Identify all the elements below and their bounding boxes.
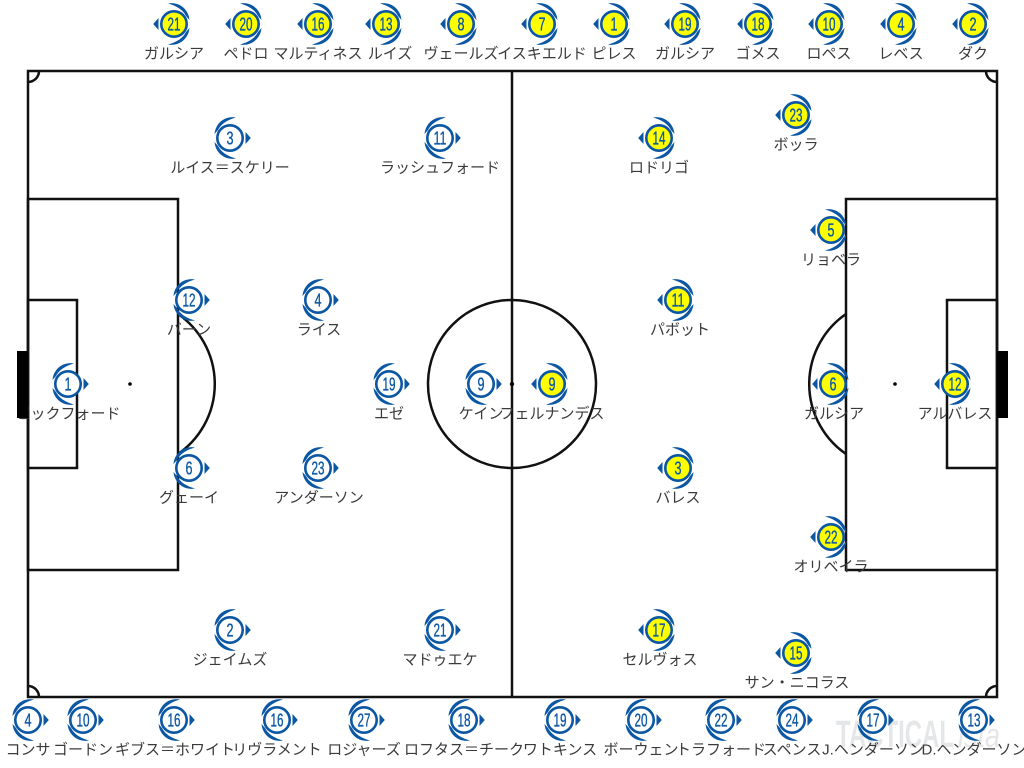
- bench: top (yellow team): 10: [822, 14, 836, 34]
- player: 3 バレス: バレス: [655, 490, 701, 506]
- player: 22 オリベイラ: オリベイラ: [793, 558, 869, 576]
- bench: top (yellow team): 21: [168, 14, 180, 34]
- player: 12 アルバレス: [918, 363, 992, 422]
- bench: bottom (white team): J.ヘンダーソン: [822, 742, 924, 758]
- bench: top (yellow team): ガルシア: [655, 46, 715, 62]
- player: 23 アンダーソン: 23: [312, 458, 324, 478]
- player: 21 マドゥエケ: [402, 609, 478, 668]
- player: 23 アンダーソン: アンダーソン: [274, 490, 364, 506]
- player: 15 サン・ニコラス: サン・ニコラス: [745, 674, 849, 692]
- bench: top (yellow team): 4: [898, 14, 904, 34]
- bench: top (yellow team): 7: [538, 14, 546, 34]
- player: 12 アルバレス: アルバレス: [918, 406, 992, 422]
- player: 5 リョベラ: [801, 209, 861, 268]
- player: 3 バレス: [655, 447, 701, 506]
- player: 19 エゼ: [374, 363, 410, 422]
- bench: bottom (white team): コンサ: [5, 742, 51, 758]
- player: 9 フェルナンデス: [499, 363, 605, 422]
- bench: bottom (white team): 24: [786, 710, 798, 730]
- bench: bottom (white team): ロフタス＝チーク: [404, 742, 524, 758]
- player: 11 パボット: 11: [672, 290, 684, 310]
- bench: bottom (white team): [5, 699, 1024, 758]
- watermark: ista: [958, 717, 1000, 755]
- bench: top (yellow team): 8: [458, 14, 464, 34]
- bench: bottom (white team): ロジャーズ: [327, 742, 401, 758]
- bench: bottom (white team): 27: [358, 710, 370, 730]
- player: 6 グェーイ: グェーイ: [159, 490, 219, 506]
- player: 12 バーン: 12: [182, 290, 196, 310]
- bench: bottom (white team): 10: [76, 710, 90, 730]
- bench: bottom (white team): 4: [24, 710, 32, 730]
- bench: bottom (white team): 19: [554, 710, 566, 730]
- player: 9 ケイン: [459, 363, 503, 422]
- player: 9 ケイン: ケイン: [459, 406, 503, 422]
- player: 22 オリベイラ: [793, 516, 869, 576]
- player: 21 マドゥエケ: 21: [434, 620, 446, 640]
- bench: top (yellow team): 13: [380, 14, 392, 34]
- watermark: TACTICAL: [836, 714, 954, 756]
- bench: bottom (white team): 20: [634, 710, 648, 730]
- player: 5 リョベラ: 5: [828, 220, 834, 240]
- bench: top (yellow team): ヴェールズ: [423, 46, 499, 62]
- bench: top (yellow team): 16: [312, 14, 324, 34]
- player: 21 マドゥエケ: マドゥエケ: [402, 652, 478, 668]
- player: 4 ライス: ライス: [297, 322, 341, 338]
- player: 6 グェーイ: [159, 447, 219, 506]
- player: 2 ジェイムズ: 2: [226, 620, 234, 640]
- bench: top (yellow team): 2: [970, 14, 976, 34]
- player: 12 バーン: バーン: [167, 322, 211, 338]
- bench: bottom (white team): D.ヘンダーソン: [921, 742, 1024, 758]
- pitch: [28, 71, 997, 697]
- player: 12 アルバレス: 12: [948, 374, 962, 394]
- player: 14 ロドリゴ: ロドリゴ: [629, 158, 689, 176]
- bench: bottom (white team): ワトキンス: [523, 742, 597, 758]
- bench: bottom (white team): トラフォード: [676, 742, 766, 758]
- player: 9 ケイン: 9: [478, 374, 484, 394]
- goal: left: [17, 351, 28, 418]
- player: 22 オリベイラ: 22: [824, 528, 838, 548]
- player: 11 パボット: [650, 279, 710, 338]
- bench: top (yellow team): ロペス: [806, 46, 852, 62]
- player: 11 パボット: パボット: [650, 322, 710, 338]
- player: 17 セルヴォス: 17: [652, 620, 666, 640]
- bench: top (yellow team): レベス: [878, 46, 924, 62]
- player: 11 ラッシュフォード: 11: [434, 128, 446, 148]
- player: 1 ピックフォード: ピックフォード: [15, 406, 121, 422]
- player: 12 バーン: [167, 279, 211, 338]
- player: 6 グェーイ: 6: [186, 458, 192, 478]
- player: 23 ボッラ: 23: [790, 106, 802, 126]
- bench: top (yellow team): 1: [610, 14, 618, 34]
- player: 11 ラッシュフォード: ラッシュフォード: [380, 160, 500, 176]
- player: 2 ジェイムズ: ジェイムズ: [193, 652, 267, 668]
- bench: bottom (white team): 22: [714, 710, 728, 730]
- player: 3 ルイス＝スケリー: ルイス＝スケリー: [170, 160, 290, 176]
- bench: top (yellow team): マルティネス: [273, 46, 363, 62]
- bench: bottom (white team): 17: [866, 710, 880, 730]
- player: 1 ピックフォード: 1: [64, 374, 72, 394]
- bench: bottom (white team): 13: [968, 710, 980, 730]
- bench: bottom (white team): ギブス＝ホワイト: [115, 740, 235, 758]
- player: 4 ライス: 4: [314, 290, 322, 310]
- bench: top (yellow team): ピレス: [591, 46, 637, 62]
- player: 2 ジェイムズ: [193, 609, 267, 668]
- bench: top (yellow team): ガルシア: [144, 46, 204, 62]
- bench: top (yellow team): ダク: [958, 46, 988, 62]
- player: 6 ガルシア: [804, 363, 864, 422]
- bench: top (yellow team): 19: [678, 14, 692, 34]
- player: 9 フェルナンデス: フェルナンデス: [499, 404, 605, 422]
- player: 23 アンダーソン: [274, 447, 364, 506]
- player: 6 ガルシア: ガルシア: [804, 406, 864, 422]
- player: 3 バレス: 3: [674, 458, 682, 478]
- bench: bottom (white team): ボーウェン: [603, 742, 679, 758]
- player: 11 ラッシュフォード: [380, 117, 500, 176]
- player: 3 ルイス＝スケリー: [170, 117, 290, 176]
- bench: top (yellow team): イスキエルド: [497, 46, 587, 62]
- bench: top (yellow team): [144, 3, 988, 62]
- goal: right: [997, 351, 1008, 418]
- player: 23 ボッラ: ボッラ: [773, 136, 819, 154]
- player: 9 フェルナンデス: 9: [548, 374, 556, 394]
- bench: top (yellow team): ゴメス: [735, 44, 781, 62]
- player: 19 エゼ: 19: [382, 374, 396, 394]
- bench: bottom (white team): ゴードン: [53, 740, 113, 758]
- bench: top (yellow team): ルイズ: [368, 46, 412, 62]
- bench: bottom (white team): リヴラメント: [232, 742, 322, 758]
- bench: bottom (white team): スペンス: [763, 742, 821, 758]
- player: 5 リョベラ: リョベラ: [801, 252, 861, 268]
- bench: top (yellow team): 20: [240, 14, 252, 34]
- player: 14 ロドリゴ: 14: [652, 128, 666, 148]
- player: 19 エゼ: エゼ: [374, 406, 404, 422]
- bench: bottom (white team): 18: [458, 710, 470, 730]
- player: 15 サン・ニコラス: [745, 632, 849, 692]
- bench: bottom (white team): 16: [270, 710, 284, 730]
- bench: top (yellow team): 18: [752, 14, 764, 34]
- player: 17 セルヴォス: [622, 609, 698, 668]
- player: 6 ガルシア: 6: [830, 374, 836, 394]
- player: 3 ルイス＝スケリー: 3: [226, 128, 234, 148]
- player: 15 サン・ニコラス: 15: [790, 644, 802, 664]
- player: 4 ライス: [297, 279, 341, 338]
- player: 1 ピックフォード: [15, 363, 121, 422]
- bench: top (yellow team): ペドロ: [223, 46, 269, 62]
- player: 14 ロドリゴ: [629, 117, 689, 176]
- player: 23 ボッラ: [773, 94, 819, 154]
- player: 17 セルヴォス: セルヴォス: [622, 652, 698, 668]
- bench: bottom (white team): 16: [168, 710, 180, 730]
